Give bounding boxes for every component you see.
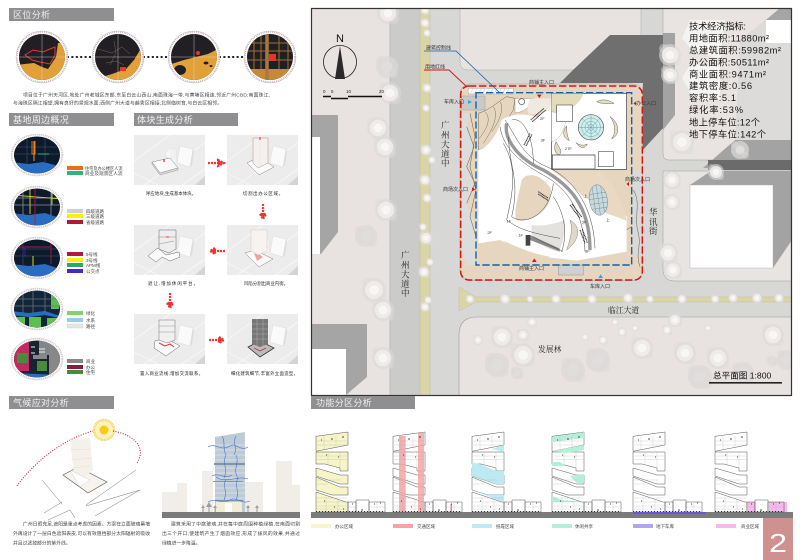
legend: greenery [67, 310, 95, 330]
entrance labels [443, 79, 656, 290]
legend: transit: 5号线 [86, 251, 98, 258]
road label: guangzhou avenue 1 [401, 250, 410, 298]
heading: surroundings [9, 113, 114, 126]
arrow down 2 [167, 293, 173, 308]
map: guangzhou coast [168, 31, 220, 83]
arrow down [260, 204, 266, 219]
legend: greenery: 水系 [86, 317, 95, 323]
site plan drawing: 2F [540, 116, 545, 121]
trees [380, 9, 399, 24]
annotation: red line [424, 64, 467, 87]
caption step 1: 呼应地块,生成基本体块。 [146, 190, 196, 197]
road label: guangzhou avenue 1: 大 [401, 270, 410, 280]
title: technical indicators: 建筑密度:0.56 [689, 80, 752, 91]
map: greenery [11, 283, 63, 330]
arrow right 2 [209, 337, 224, 343]
climate text right: 建筑采用了中庭玻璃,并在每中庭周围种植绿植,在南面切割 [171, 520, 300, 528]
legend: flows: 商业及观景区人流 [85, 170, 123, 177]
legend: transit: APM线 [86, 262, 101, 268]
scale bar: 10 [346, 89, 352, 94]
heading: climate [9, 396, 114, 409]
section: lobby [472, 432, 541, 512]
wind section [162, 432, 300, 518]
entrance labels: 车库入口 [590, 283, 610, 290]
road label: guangzhou avenue 2: 大 [441, 140, 450, 150]
location text: 项目位于广州天河区,地处广州老城区东部,东至白云山西山,南面珠海一带,与黄埔区相连,邻近广州CBD;南面珠江, [23, 92, 270, 98]
entrance labels: 商场次入口 [443, 186, 468, 193]
legend: zones: 商业区域 [741, 523, 759, 530]
legend: zones: 抵靠区域 [496, 523, 514, 530]
road label: guangzhou avenue 2: 州 [441, 130, 450, 140]
legend: land use: 商业 [86, 358, 95, 365]
site plan drawing [460, 84, 643, 281]
map: pedestrian flows [10, 134, 64, 176]
heading: location analysis [9, 8, 114, 21]
massing step 4 [134, 225, 205, 275]
legend: land use: 办公 [86, 364, 95, 371]
road label: linjiang avenue: 临江大道 [608, 305, 639, 315]
legend: roads [67, 208, 104, 226]
caption step 4: 退让,增加休闲平台。 [148, 280, 198, 287]
connector dots [67, 56, 246, 58]
panel: site surroundings [9, 113, 123, 385]
heading: function zoning [311, 396, 415, 409]
title: technical indicators: 用地面积:11880m² [689, 32, 769, 44]
massing step 5 [134, 314, 205, 364]
upper right block [662, 9, 778, 160]
scale bar: 20 [379, 89, 385, 94]
map: land use [11, 338, 63, 385]
section: commercial [715, 432, 787, 512]
legend: transit [67, 251, 101, 275]
legend: zones [311, 523, 759, 530]
caption step 3: 凹陷分割出商业内街。 [244, 280, 288, 287]
map: road levels [10, 186, 64, 228]
road label: guangzhou avenue 2: 中 [441, 158, 450, 168]
heading: location analysis: 区位分析 [13, 9, 50, 20]
entrance labels: 车库入口 [444, 98, 464, 106]
section: office [316, 432, 385, 512]
lower right block [663, 171, 792, 281]
annotation: control line [424, 44, 500, 93]
climate text left: 并且过滤掉部分的紫外线。 [13, 540, 71, 546]
heading: massing: 体块生成分析 [137, 114, 193, 125]
site plan drawing: 27F [565, 146, 572, 151]
site plan drawing: 上 [583, 192, 587, 198]
caption: site plan scale [709, 370, 782, 384]
site plan drawing: 上 [606, 216, 610, 222]
entrance labels: 商场次入口 [625, 176, 650, 183]
road label: huaxun street: 讯 [649, 217, 658, 227]
road label: guangzhou avenue 1: 道 [401, 279, 410, 289]
map: site streets [244, 31, 296, 83]
map: guangdong region [92, 31, 144, 83]
road label: guangzhou avenue 1: 州 [401, 260, 410, 270]
massing step 2 [227, 135, 298, 185]
caption: site plan scale: 总平面图 1:800 [713, 370, 771, 380]
arrow right 1 [208, 160, 224, 166]
heading: function zoning: 功能分区分析 [316, 397, 372, 408]
entrance labels: 办公入口 [636, 100, 656, 107]
title: technical indicators: 地上停车位:12个 [689, 116, 760, 128]
title: technical indicators [689, 20, 781, 140]
legend: zones: 办公区域 [335, 523, 353, 530]
caption step 5: 置入商业流线,增加交流联系。 [140, 370, 203, 377]
icon: north arrow: N [336, 33, 344, 45]
legend: flows: 住宅及办公楼区人流 [85, 165, 123, 172]
scale bar: 5 [331, 89, 334, 94]
panel: site plan [311, 2, 797, 396]
legend: roads: 四级道路 [86, 208, 104, 215]
section: leisure [552, 432, 621, 512]
site plan drawing: 3F [582, 219, 587, 224]
title: technical indicators: 绿化率:53% [689, 104, 743, 115]
site roads [42, 470, 140, 520]
site plan drawing: 1F [507, 219, 512, 224]
legend: land use: 住宅 [86, 369, 95, 375]
panel: massing generation [134, 113, 298, 377]
legend: roads: 三级道路 [86, 213, 104, 220]
legend: transit: 公交点 [86, 268, 100, 275]
climate text left: 广州日照充足,遮阳是重点考虑的因素。方案在立面玻璃幕墙 [23, 520, 150, 528]
title: technical indicators: 地下停车位:142个 [689, 128, 766, 140]
heading: surroundings: 基地周边概况 [13, 114, 69, 125]
title: technical indicators: 商业面积:9471m² [689, 68, 766, 80]
legend: zones: 交通区域 [417, 523, 435, 530]
icon: sun [93, 419, 115, 441]
top block [460, 8, 641, 70]
legend: land use [67, 358, 95, 375]
road label: guangzhou avenue 1: 中 [401, 288, 410, 298]
east-west median [459, 287, 792, 311]
title: technical indicators: 办公面积:50511m² [689, 56, 769, 68]
massing step 1 [134, 135, 205, 185]
icon: north arrow [324, 33, 356, 79]
label: development forest: 发展林 [538, 344, 562, 354]
legend: greenery: 路径 [86, 323, 95, 330]
plan background [311, 2, 797, 396]
road label: huaxun street [649, 207, 658, 236]
caption step 6: 细化建筑细节,丰富外立面造型。 [231, 370, 298, 377]
site plan drawing: 2F [487, 230, 493, 235]
location text: 与海珠区隔江相望,拥有良好的景观水面;西侧广州大道与越秀区相接;北侧临树育,与白云区相邻。 [13, 100, 222, 106]
map: china [16, 31, 68, 83]
annotation: control line: 建筑控制线 [426, 44, 451, 52]
location text [13, 92, 270, 106]
section: circulation [393, 432, 462, 512]
climate text right: 出三个开口,使建筑产生了烟囱效应,形成了拔风的效果,并通过 [162, 530, 300, 537]
legend: greenery: 绿化 [86, 310, 95, 317]
tower massing [63, 438, 107, 493]
upper right shadows [560, 35, 663, 153]
site plan drawing: 1F [518, 233, 524, 238]
lower block [459, 317, 792, 396]
section: underground parking [633, 432, 706, 514]
heading: massing [134, 113, 238, 126]
scale bar: 0 [323, 89, 326, 94]
legend: transit: 3号线 [86, 257, 98, 264]
road label: guangzhou avenue 2: 广 [441, 120, 450, 130]
climate text right: 绿植进一步降温。 [162, 540, 200, 546]
road label: huaxun street: 华 [649, 207, 658, 217]
lower right building [690, 171, 792, 268]
road label: guangzhou avenue 1: 广 [401, 250, 410, 260]
title: technical indicators: 技术经济指标: [689, 20, 746, 32]
climate text left [13, 520, 150, 546]
site plan drawing: 3F [585, 249, 590, 254]
caption step 2: 切割出办公区域。 [243, 190, 283, 197]
panel: climate analysis [9, 396, 300, 546]
road label: guangzhou avenue 2 [441, 120, 450, 168]
massing step 6 [227, 314, 298, 364]
map: transit [10, 236, 64, 280]
panel: function zoning [311, 396, 793, 530]
climate text right [162, 520, 300, 546]
legend: flows [67, 165, 123, 177]
climate text left: 外再设计了一层白色遮阳表皮,可以有效阻挡部分太阳辐射的吸收 [13, 530, 150, 537]
left buildings [311, 115, 338, 254]
title: technical indicators: 容积率:5.1 [689, 92, 736, 103]
site plan drawing: 3F [541, 137, 546, 142]
massing step 3 [227, 225, 298, 275]
legend: roads: 省级道路 [86, 219, 104, 226]
road label: guangzhou avenue 2: 道 [441, 149, 450, 159]
page number badge: 2 [769, 528, 787, 558]
arrow left [210, 248, 225, 254]
heading: climate: 气候应对分析 [13, 397, 69, 408]
page number badge [763, 518, 793, 560]
panel: location analysis [9, 8, 296, 106]
ground bar [311, 512, 793, 518]
plan frame [312, 8, 792, 396]
sun path [17, 431, 140, 486]
legend: zones: 休闲共享 [575, 523, 593, 530]
legend: zones: 地下车库 [656, 523, 674, 530]
title: technical indicators: 总建筑面积:59982m² [689, 44, 781, 56]
entrance labels: 商铺主入口 [529, 79, 554, 86]
annotation: red line: 用地红线 [425, 64, 445, 70]
road label: huaxun street: 街 [649, 226, 658, 236]
entrance labels: 商铺主入口 [519, 265, 544, 272]
scale bar [323, 89, 385, 98]
